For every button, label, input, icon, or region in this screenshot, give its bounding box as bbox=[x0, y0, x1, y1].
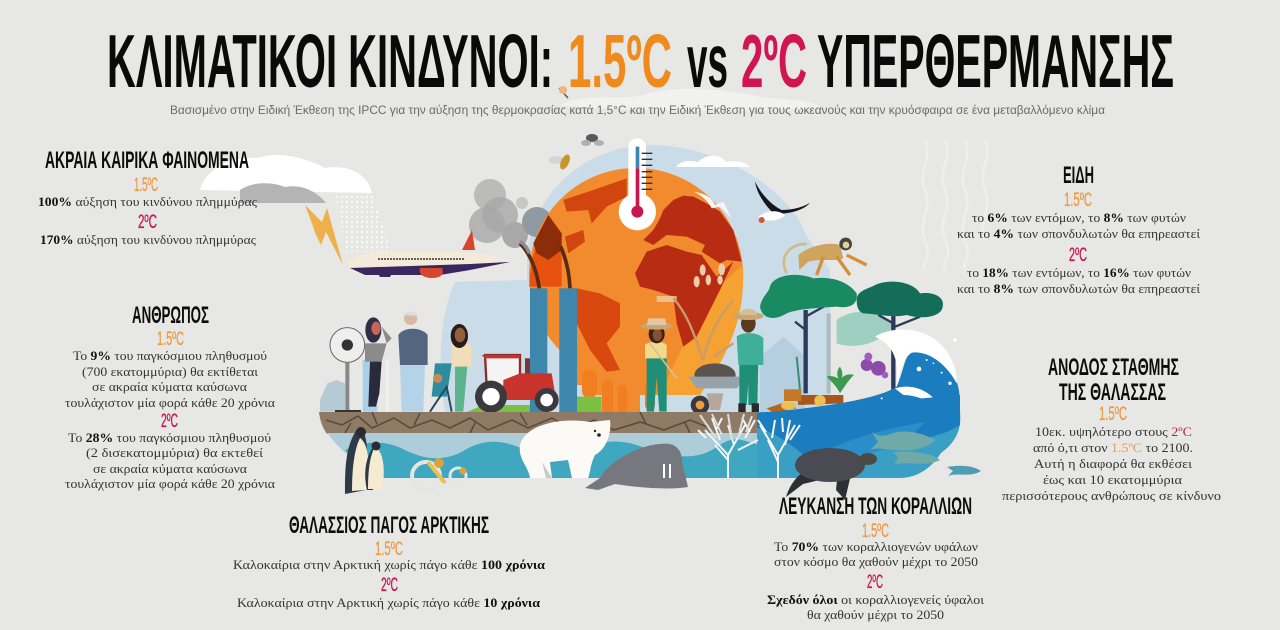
heading: ΑΝΘΡΩΠΟΣ bbox=[132, 302, 209, 329]
2 label: 2ºC bbox=[161, 411, 178, 432]
shrimp and krill bbox=[412, 458, 466, 490]
2 text: και το 8% των σπονδυλωτών θα επηρεαστεί bbox=[957, 282, 1201, 296]
woman with hijab bbox=[363, 317, 392, 412]
2 text: σε ακραία κύματα καύσωνα bbox=[93, 462, 247, 476]
insects bbox=[549, 86, 604, 171]
panel: coral bleaching bbox=[767, 493, 985, 622]
pale blue backdrop bbox=[441, 145, 830, 412]
2 text: Καλοκαίρια στην Αρκτική χωρίς πάγο κάθε 10 χρόνια bbox=[237, 596, 540, 610]
corals bbox=[698, 414, 800, 478]
trees bbox=[760, 275, 943, 393]
thermometer bbox=[619, 138, 656, 230]
seagull on globe bbox=[693, 192, 732, 218]
title: 1.5ºC bbox=[568, 19, 672, 103]
fish in sea bbox=[870, 432, 981, 476]
1.5 text bbox=[65, 349, 275, 410]
1.5 text bbox=[957, 211, 1201, 241]
1.5 label: 1.5ºC bbox=[375, 539, 403, 560]
polar bear bbox=[520, 420, 610, 478]
young woman bbox=[451, 324, 472, 412]
1.5 text: Το 70% των κοραλλιογενών υφάλων bbox=[774, 540, 978, 554]
turtle bbox=[786, 448, 877, 500]
heat waves bbox=[923, 140, 987, 270]
2 text: (2 δισεκατομμύρια) θα εκτεθεί bbox=[86, 446, 264, 460]
heading: ΑΚΡΑΙΑ ΚΑΙΡΙΚΑ ΦΑΙΝΟΜΕΝΑ bbox=[45, 147, 249, 174]
1.5 label: 1.5ºC bbox=[157, 329, 184, 350]
1.5 text: στον κόσμο θα χαθούν μέχρι το 2050 bbox=[774, 555, 978, 569]
1.5 text: τουλάχιστον μία φορά κάθε 20 χρόνια bbox=[65, 396, 275, 410]
wheelbarrow bbox=[688, 363, 747, 414]
heading: ΘΑΛΑΣΣΙΟΣ ΠΑΓΟΣ ΑΡΚΤΙΚΗΣ bbox=[289, 512, 489, 539]
body text: Αυτή η διαφορά θα εκθέσει bbox=[1034, 457, 1193, 471]
drips bbox=[582, 370, 655, 452]
title: 2ºC bbox=[741, 19, 807, 103]
walrus bbox=[585, 444, 688, 490]
panel: sea level rise bbox=[1002, 354, 1221, 503]
2 label: 2ºC bbox=[867, 572, 883, 593]
logs bbox=[767, 389, 843, 413]
people, fan and tractor bbox=[320, 288, 602, 413]
2 text: 170% αύξηση του κινδύνου πλημμύρας bbox=[40, 233, 256, 247]
2 label: 2ºC bbox=[1069, 245, 1087, 266]
1.5 text: Το 9% του παγκόσμιου πληθυσμού bbox=[73, 349, 267, 363]
storm cloud bbox=[200, 155, 372, 203]
1.5 text bbox=[774, 540, 978, 569]
illustration: central climate scene bbox=[200, 86, 987, 500]
body text: έως και 10 εκατομμύρια bbox=[1043, 473, 1183, 487]
rain bbox=[335, 193, 392, 252]
heading: ΑΝΟΔΟΣ ΣΤΑΘΜΗΣ bbox=[1048, 354, 1179, 381]
2 text: τουλάχιστον μία φορά κάθε 20 χρόνια bbox=[65, 477, 275, 491]
2 text: Το 28% του παγκόσμιου πληθυσμού bbox=[68, 431, 271, 445]
1.5 text: σε ακραία κύματα καύσωνα bbox=[92, 380, 247, 394]
body text bbox=[1002, 425, 1221, 503]
chimneys bbox=[530, 288, 577, 413]
dry crop bbox=[673, 298, 733, 360]
heading: ΕΙΔΗ bbox=[1063, 162, 1094, 189]
1.5 text: 100% αύξηση του κινδύνου πλημμύρας bbox=[38, 195, 257, 209]
2 text bbox=[65, 431, 275, 491]
old man bbox=[386, 311, 428, 412]
title: ΚΛΙΜΑΤΙΚΟΙ ΚΙΝΔΥΝΟΙ: bbox=[107, 19, 553, 103]
panel: humans bbox=[65, 302, 275, 491]
1.5 label: 1.5ºC bbox=[1099, 404, 1127, 425]
heading: ΛΕΥΚΑΝΣΗ ΤΩΝ ΚΟΡΑΛΛΙΩΝ bbox=[779, 493, 972, 520]
title: vs bbox=[687, 19, 728, 103]
wave bbox=[758, 330, 959, 430]
1.5 label: 1.5ºC bbox=[862, 521, 889, 542]
heading bbox=[1048, 354, 1179, 406]
1.5 text: το 6% των εντόμων, το 8% των φυτών bbox=[972, 211, 1186, 225]
farmers, trees, wave bbox=[641, 182, 959, 430]
cloud behind title bbox=[560, 89, 822, 111]
1.5 label: 1.5ºC bbox=[1064, 190, 1092, 211]
panel: arctic sea ice bbox=[233, 512, 545, 610]
bird bbox=[755, 182, 810, 223]
penguins bbox=[345, 427, 384, 494]
body text: από ό,τι στον 1.5ºC το 2100. bbox=[1033, 441, 1193, 455]
body text: 10εκ. υψηλότερο στους 2ºC bbox=[1035, 425, 1192, 439]
2 text: Σχεδόν όλοι οι κοραλλιογενείς ύφαλοι bbox=[767, 593, 985, 607]
1.5 text: και το 4% των σπονδυλωτών θα επηρεαστεί bbox=[957, 227, 1201, 241]
man farmer bbox=[733, 309, 764, 413]
panel: species bbox=[957, 162, 1201, 296]
pale trees and houses bbox=[760, 337, 805, 413]
panel: extreme weather bbox=[38, 147, 257, 247]
2 text bbox=[957, 266, 1201, 296]
underground and sea band bbox=[319, 395, 960, 478]
smoke bbox=[469, 179, 552, 248]
subtitle: Βασισμένο στην Ειδική Έκθεση της IPCC για την αύξηση της θερμοκρασίας κατά 1,5°C και την Ειδική Έκθεση για τους ωκεανούς και την κρυόσφαιρα σε ένα μεταβαλλόμενο κλίμα bbox=[170, 105, 1105, 117]
1.5 text: (700 εκατομμύρια) θα εκτίθεται bbox=[82, 365, 259, 379]
body text: περισσότερους ανθρώπους σε κίνδυνο bbox=[1002, 489, 1221, 503]
monkey bbox=[784, 238, 867, 275]
stroller bbox=[430, 363, 452, 412]
plane bbox=[348, 230, 510, 278]
2 text bbox=[767, 593, 985, 622]
2 label: 2ºC bbox=[381, 575, 398, 596]
heading: ΤΗΣ ΘΑΛΑΣΣΑΣ bbox=[1059, 379, 1166, 406]
1.5 text: Καλοκαίρια στην Αρκτική χωρίς πάγο κάθε 100 χρόνια bbox=[233, 558, 545, 572]
green grass bbox=[463, 397, 602, 413]
lightning bolt bbox=[305, 205, 343, 265]
fan bbox=[330, 328, 365, 413]
2 text: το 18% των εντόμων, το 16% των φυτών bbox=[967, 266, 1191, 280]
tractor bbox=[475, 355, 559, 413]
globe bbox=[520, 168, 743, 436]
2 text: θα χαθούν μέχρι το 2050 bbox=[807, 608, 944, 622]
1.5 label: 1.5ºC bbox=[134, 175, 158, 196]
pale buildings bbox=[320, 380, 345, 412]
woman farmer bbox=[641, 318, 677, 412]
small cloud bbox=[676, 156, 750, 167]
2 label: 2ºC bbox=[138, 212, 157, 233]
plants bbox=[797, 353, 888, 393]
